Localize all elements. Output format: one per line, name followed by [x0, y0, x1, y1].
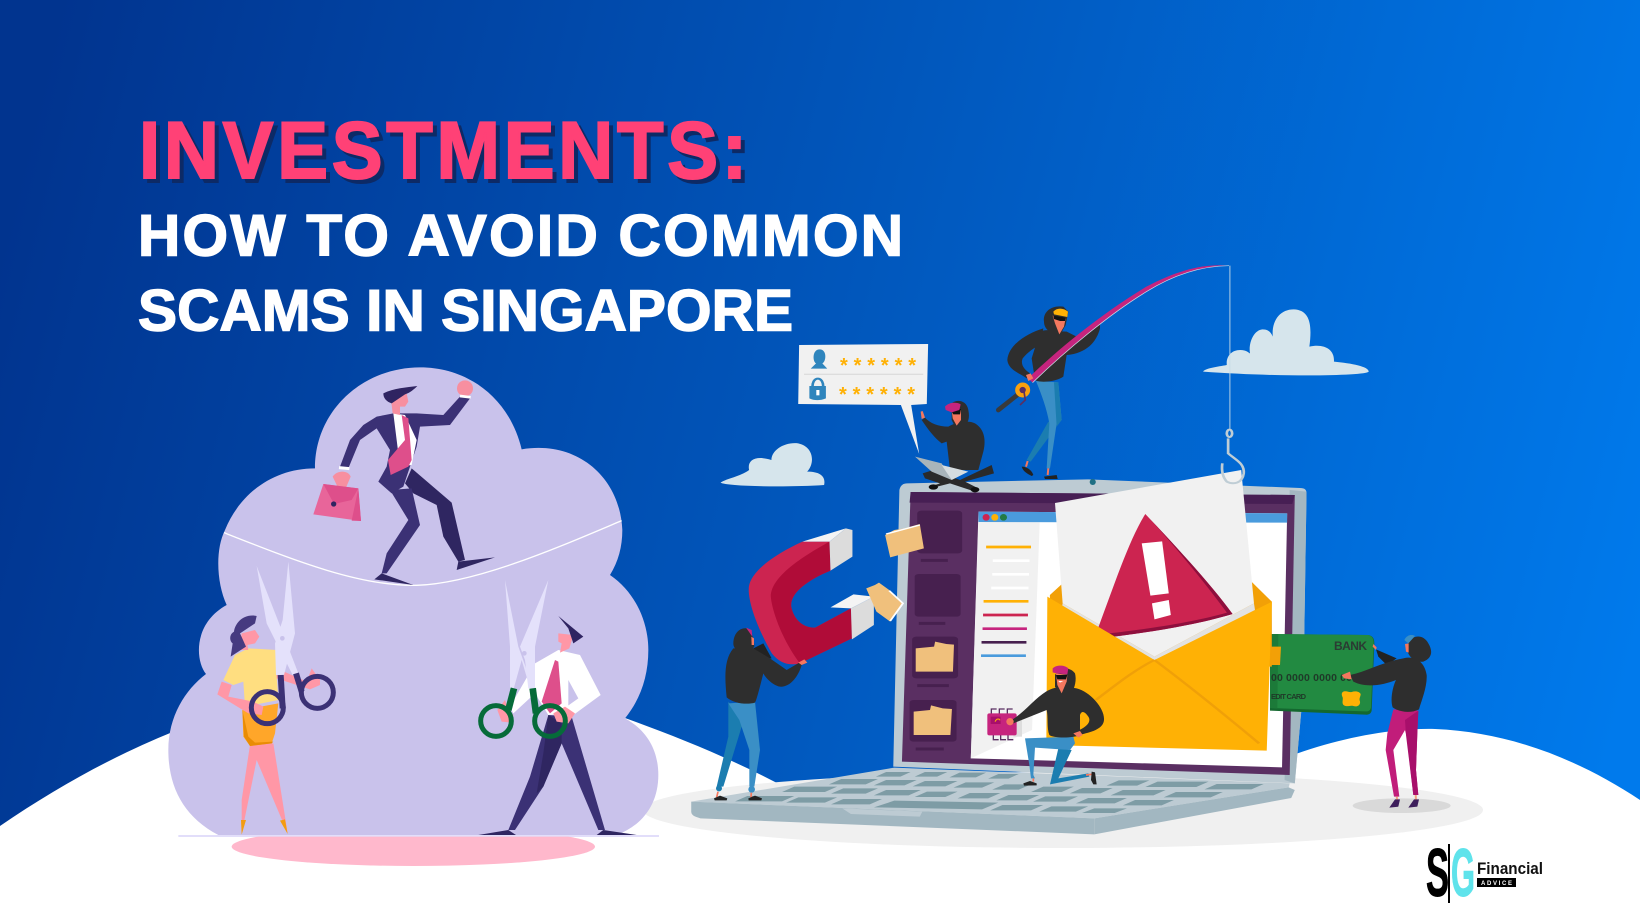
clouds and fishing line: [721, 266, 1369, 486]
logo: SG Financial Advice: ADVICE: [1481, 881, 1512, 887]
icon: woman's scissors: [251, 562, 333, 724]
kneeling hacker with chip: [987, 666, 1104, 786]
bank card: BANK: [1334, 639, 1367, 653]
white snowy hills: [0, 718, 1640, 924]
logo: SG Financial Advice: [1426, 844, 1542, 903]
fisherman hacker with rod: [998, 265, 1229, 479]
subtitle line 2: SCAMS IN SINGAPORE: [138, 278, 793, 344]
icon: man's scissors: [481, 580, 565, 736]
icon: hook: [1222, 430, 1244, 483]
alert paper: [1055, 470, 1254, 657]
laptop keyboard deck: [691, 768, 1295, 834]
businessman on rope: [313, 380, 495, 585]
bank card: [1270, 634, 1374, 715]
woman with scissors: [217, 562, 333, 835]
icon: padlock: [809, 379, 826, 400]
icon: flying folders: [866, 524, 924, 622]
login speech bubble: [798, 344, 928, 454]
pink floor shadow: [232, 836, 595, 866]
tightrope: [224, 521, 622, 585]
password asterisks: ******: [839, 384, 915, 406]
headline: investments: INVESTMENTS:: [143, 109, 751, 200]
envelope front: [1046, 597, 1272, 751]
title: [138, 105, 903, 344]
left cloud: [721, 443, 824, 486]
hacker holding card: [1342, 635, 1451, 813]
hacker sitting with laptop: [915, 401, 994, 492]
password asterisks: ******: [840, 355, 916, 377]
bank card: EDIT CARD: [1271, 692, 1307, 701]
keyboard keys: [735, 772, 1264, 813]
ground line: [178, 835, 659, 837]
hacker holding magnet: [714, 628, 807, 800]
laptop lid: [893, 479, 1307, 783]
laptop screen: [902, 492, 1295, 775]
headline: investments: INVESTMENTS:: [139, 105, 747, 196]
illustration: tightrope businessman and scissors: [168, 367, 659, 866]
webcam: [1090, 479, 1096, 485]
logo: SG Financial Advice: S: [1426, 835, 1449, 911]
right cloud: [1203, 309, 1369, 375]
logo: SG Financial Advice: Financial: [1477, 859, 1543, 878]
fishing line: [1229, 266, 1231, 430]
icon: fishing reel: [1017, 373, 1033, 405]
email alert and magnet: [691, 470, 1295, 834]
lilac cloud backdrop: [168, 367, 658, 835]
magnet: [749, 528, 874, 664]
bank card: 00 0000 0000 00: [1271, 672, 1352, 684]
logo: SG Financial Advice: G: [1451, 835, 1475, 911]
man with scissors: [478, 580, 637, 835]
subtitle line 1: HOW TO AVOID COMMON: [138, 204, 903, 268]
icon: user: [811, 349, 827, 369]
warning triangle: [1098, 514, 1233, 637]
icon: stolen chip: [987, 709, 1022, 740]
envelope back: [1050, 582, 1272, 667]
laptop lid and screen: [893, 479, 1307, 783]
fishing rod: [1028, 265, 1229, 383]
ground shadow under laptop: [643, 772, 1483, 848]
sidebar tiles: [910, 511, 962, 749]
window text lines: [981, 547, 1031, 656]
password asterisks: [839, 355, 916, 406]
app window: [971, 512, 1287, 767]
icon: pink briefcase: [313, 484, 361, 521]
